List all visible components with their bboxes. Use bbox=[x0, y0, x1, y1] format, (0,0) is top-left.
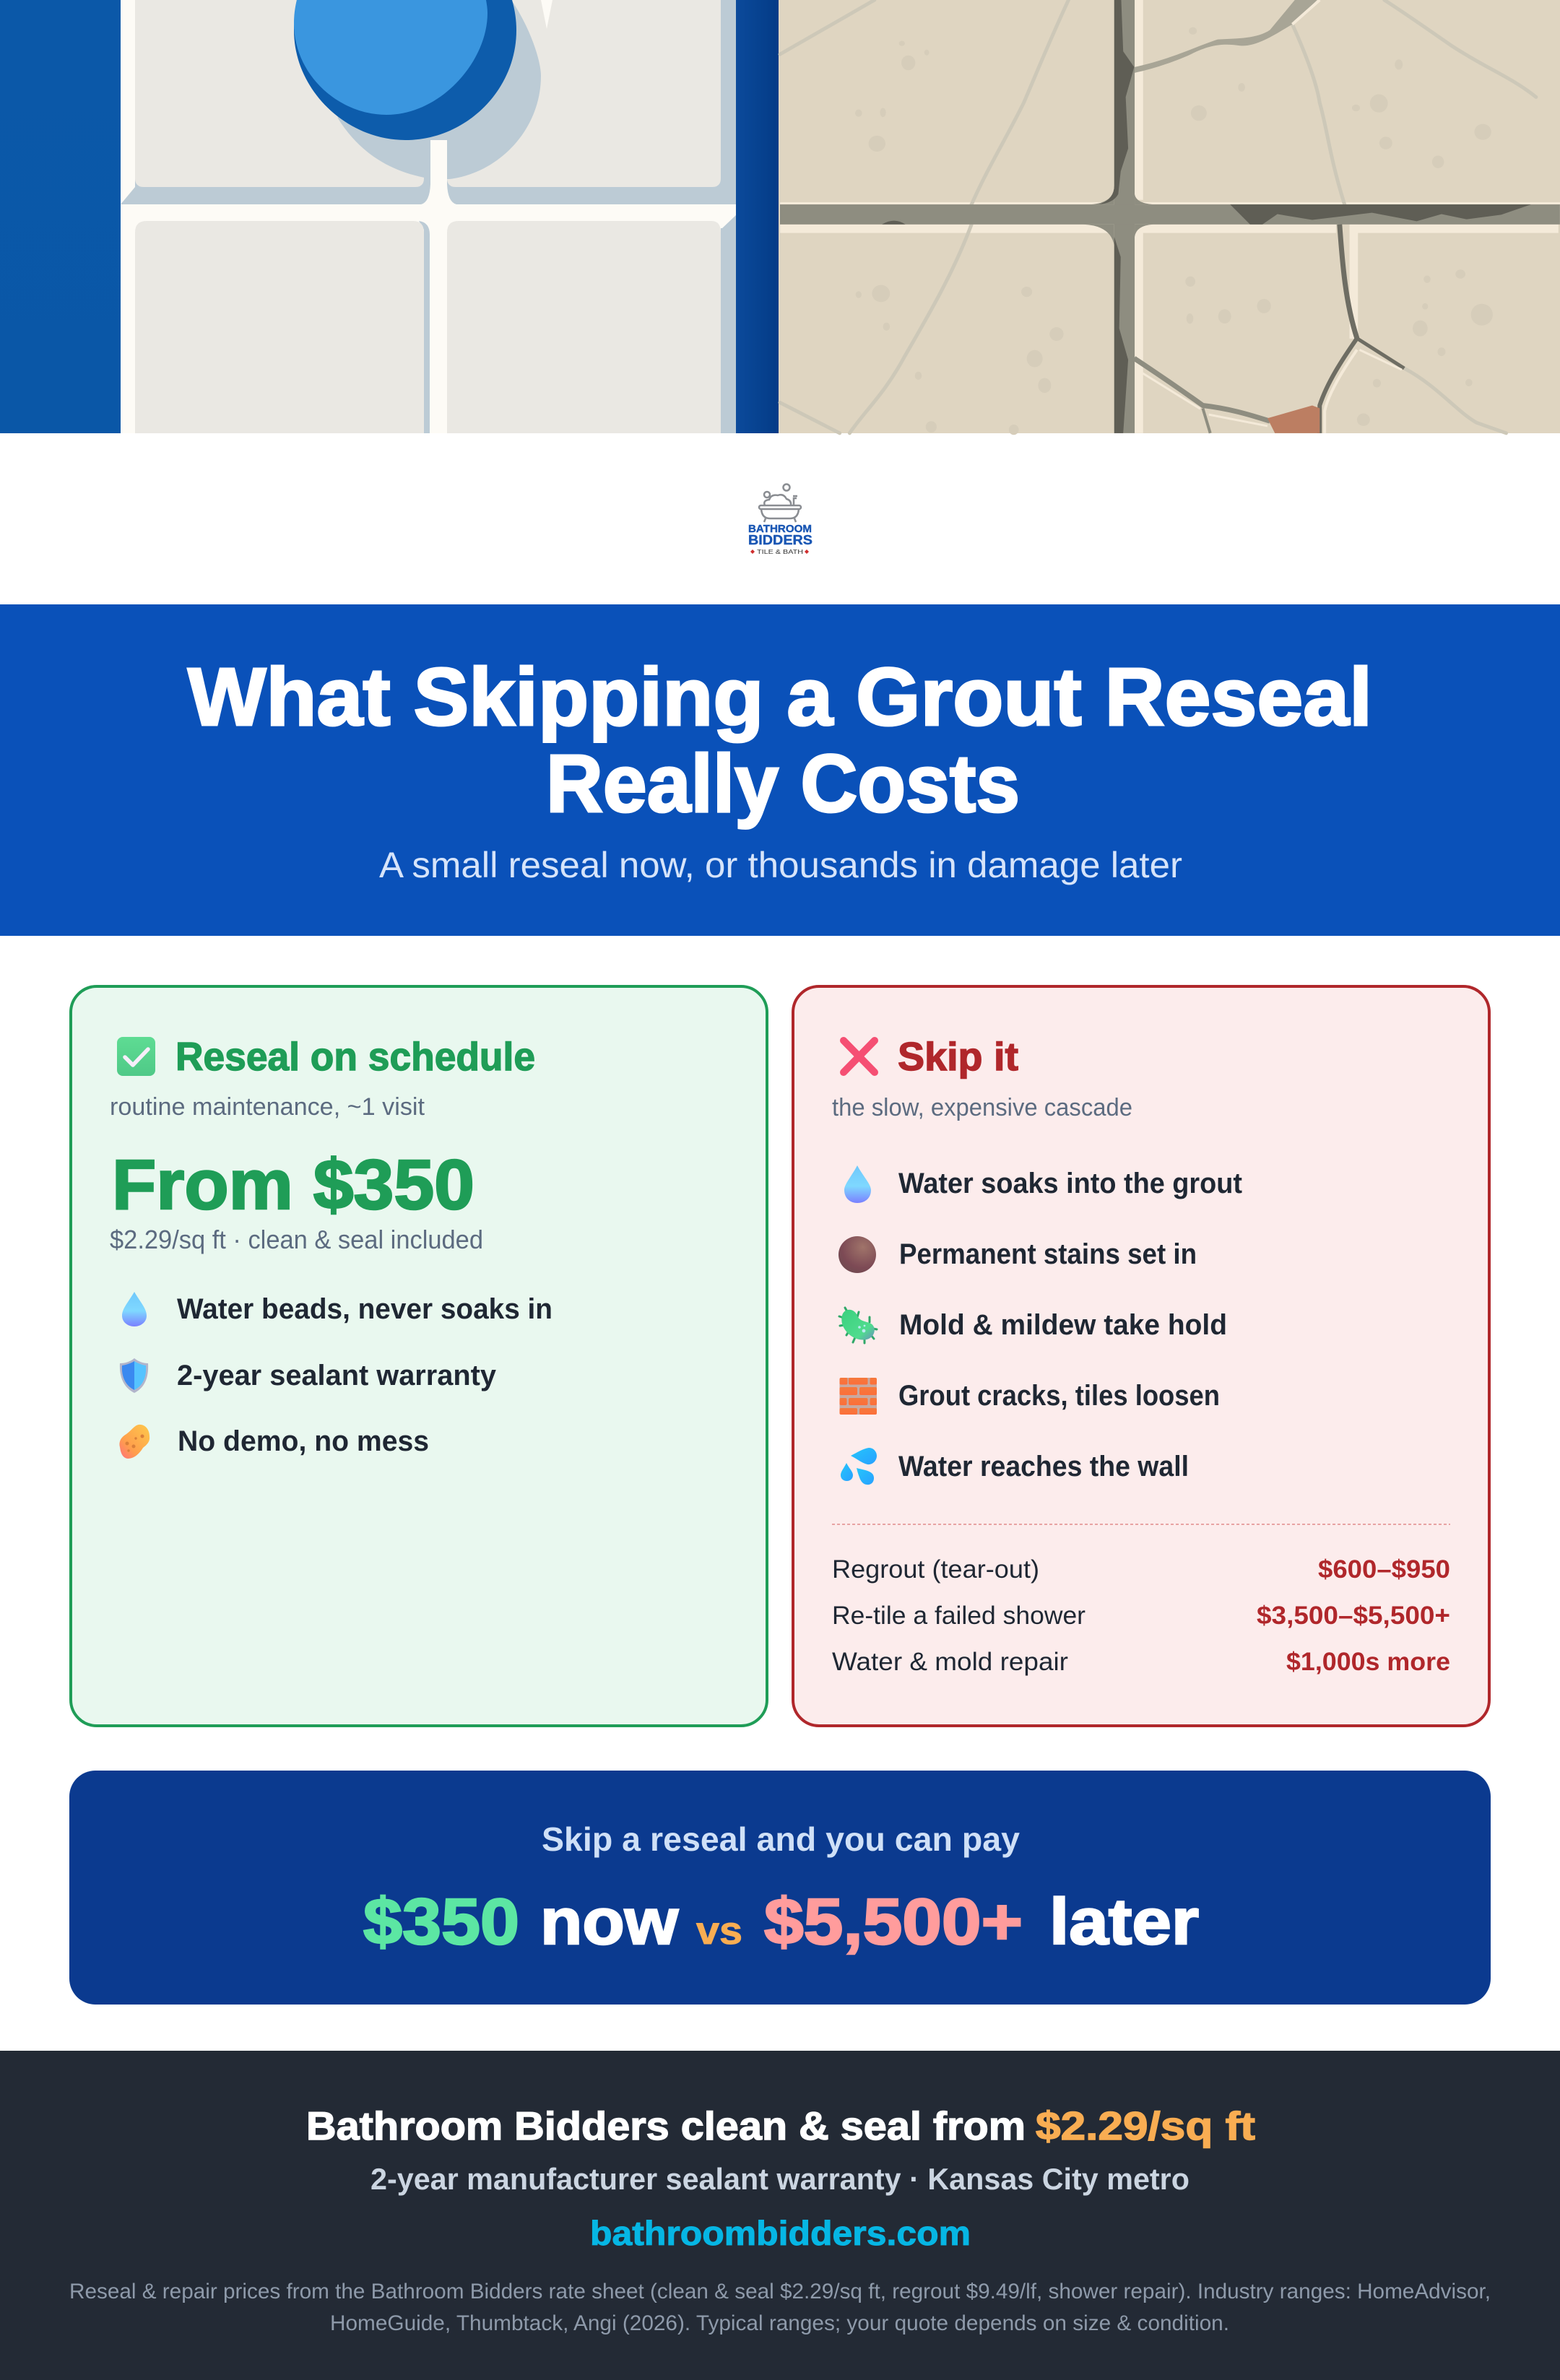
icon: bathtub bbox=[759, 484, 801, 522]
panel: skip it bbox=[793, 986, 1489, 1726]
tile highlights bbox=[780, 0, 1560, 433]
cost row: water and mold bbox=[832, 1648, 1450, 1676]
grout lines bbox=[780, 0, 1560, 433]
title bbox=[188, 651, 1372, 829]
step: stains bbox=[838, 1236, 1197, 1273]
step: water soaks in: Water soaks into the grout bbox=[898, 1168, 1242, 1199]
comparison figures: $350 bbox=[363, 1886, 519, 1958]
hero image: sealed tile with water bead bbox=[0, 0, 779, 433]
benefit: water beads: Water beads, never soaks in bbox=[177, 1293, 552, 1325]
step: water reaches wall: Water reaches the wall bbox=[898, 1451, 1189, 1482]
footer offer: $2.29/sq ft bbox=[1036, 2103, 1255, 2148]
subheading: routine maintenance, ~1 visit bbox=[110, 1093, 425, 1121]
icon: water bead with shadow bbox=[294, 0, 552, 185]
footnote: Reseal & repair prices from the Bathroom Bidders rate sheet (clean & seal $2.29/sq ft, regrout $9.49/lf, shower repair). Industry ranges: HomeAdvisor, bbox=[69, 2280, 1491, 2303]
comparison figures bbox=[363, 1886, 1199, 1958]
title: What Skipping a Grout Reseal bbox=[188, 651, 1372, 742]
panel: reseal on schedule bbox=[71, 986, 767, 1726]
benefit: no demo: No demo, no mess bbox=[178, 1425, 429, 1457]
cost row: regrout: $600–$950 bbox=[1318, 1555, 1450, 1584]
banner lead-in: Skip a reseal and you can pay bbox=[542, 1820, 1020, 1858]
comparison figures: vs bbox=[696, 1909, 742, 1953]
heading: reseal on schedule: Reseal on schedule bbox=[176, 1034, 535, 1079]
spots bbox=[855, 27, 1493, 435]
cost row: re-tile: $3,500–$5,500+ bbox=[1257, 1602, 1450, 1630]
comparison figures: $5,500+ bbox=[764, 1886, 1023, 1958]
heading: skip it: Skip it bbox=[898, 1034, 1018, 1079]
step: cracked grout bbox=[839, 1378, 1220, 1415]
footnote: HomeGuide, Thumbtack, Angi (2026). Typical ranges; your quote depends on size & condition. bbox=[330, 2311, 1229, 2335]
header band bbox=[0, 604, 1560, 936]
icon: check mark bbox=[117, 1037, 155, 1076]
price detail: $2.29/sq ft · clean & seal included bbox=[110, 1225, 483, 1254]
subtitle: A small reseal now, or thousands in damage later bbox=[379, 845, 1182, 885]
logo wordmark bbox=[748, 524, 812, 547]
cost row: regrout: Regrout (tear-out) bbox=[832, 1555, 1039, 1584]
footnote bbox=[69, 2280, 1491, 2335]
footer offer: Bathroom Bidders clean & seal from bbox=[306, 2103, 1026, 2148]
title: Really Costs bbox=[546, 738, 1020, 829]
main cracks bbox=[1135, 0, 1317, 73]
dark grout erosion bbox=[882, 0, 1531, 433]
icon: cross mark bbox=[844, 1041, 875, 1072]
logo wordmark: BIDDERS bbox=[748, 533, 812, 547]
step: cracked grout: Grout cracks, tiles loosen bbox=[898, 1380, 1220, 1412]
cost row: water and mold: $1,000s more bbox=[1286, 1648, 1450, 1676]
price: From $350 bbox=[112, 1145, 474, 1224]
step: stains: Permanent stains set in bbox=[899, 1238, 1197, 1270]
logo: Bathroom Bidders: TILE & BATH bbox=[757, 548, 803, 555]
cost row: re-tile: Re-tile a failed shower bbox=[832, 1602, 1086, 1630]
footer bbox=[0, 2051, 1560, 2380]
logo wordmark: BATHROOM bbox=[748, 524, 812, 535]
subheading: the slow, expensive cascade bbox=[832, 1094, 1132, 1121]
cost row: re-tile bbox=[832, 1602, 1450, 1630]
step: water reaches wall bbox=[841, 1448, 1189, 1485]
hero image: neglected cracked grout bbox=[779, 0, 1560, 435]
logo: Bathroom Bidders bbox=[748, 484, 812, 555]
cost row: regrout bbox=[832, 1555, 1450, 1584]
panel: comparison banner bbox=[69, 1771, 1491, 2005]
comparison figures: later bbox=[1049, 1886, 1199, 1958]
benefit: warranty: 2-year sealant warranty bbox=[177, 1360, 497, 1391]
footer warranty line: 2-year manufacturer sealant warranty · Kansas City metro bbox=[370, 2162, 1190, 2196]
comparison figures: now bbox=[540, 1886, 679, 1958]
cost row: water and mold: Water & mold repair bbox=[832, 1648, 1068, 1676]
footer website: bathroombidders.com bbox=[590, 2214, 971, 2252]
step: mold: Mold & mildew take hold bbox=[899, 1309, 1227, 1341]
light hairline cracks bbox=[780, 0, 1536, 433]
